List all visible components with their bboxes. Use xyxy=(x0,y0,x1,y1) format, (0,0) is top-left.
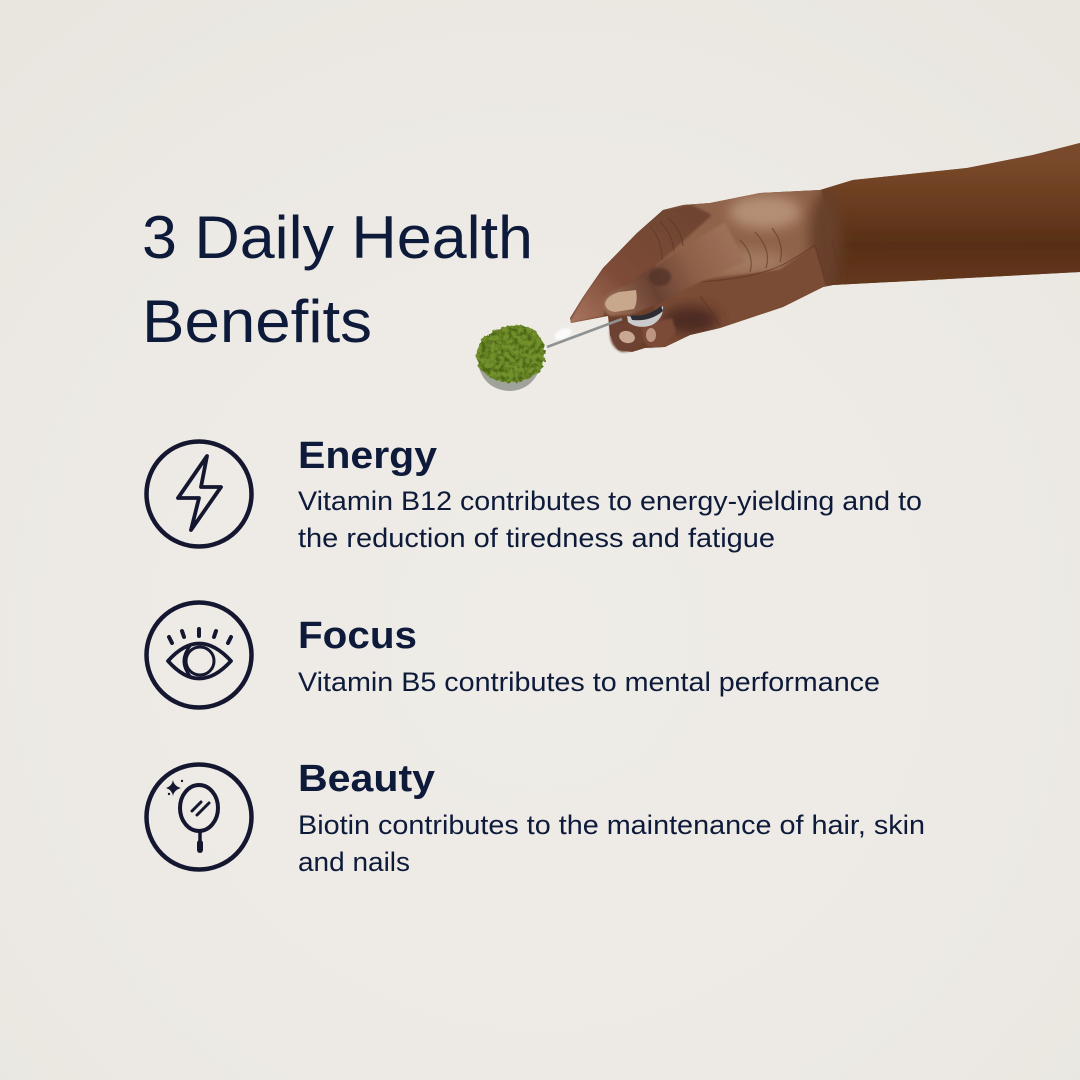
text: beauty description xyxy=(298,810,925,877)
text: beauty description: and nails xyxy=(298,847,410,877)
benefit: beauty xyxy=(146,758,925,877)
text: focus description: Vitamin B5 contributes to mental performance xyxy=(298,667,880,697)
heading: energy: Energy xyxy=(298,435,437,477)
metal ring xyxy=(627,306,663,327)
text: energy description: the reduction of tiredness and fatigue xyxy=(298,523,775,553)
text: beauty description: Biotin contributes to the maintenance of hair, skin xyxy=(298,810,925,840)
index finger xyxy=(568,204,712,324)
icon: hand mirror xyxy=(146,764,252,870)
green powder xyxy=(476,325,545,383)
text: energy description xyxy=(298,486,922,553)
thumb xyxy=(603,222,745,316)
spoon glint xyxy=(553,326,573,342)
lower fingers xyxy=(610,322,644,352)
knuckle and wrist creases xyxy=(650,218,900,326)
icon: lightning bolt xyxy=(146,442,252,546)
finger nails xyxy=(618,329,636,345)
forearm xyxy=(822,143,1080,287)
thumb nail xyxy=(605,290,637,312)
title: 3 Daily Health xyxy=(142,204,533,271)
benefit: energy xyxy=(146,435,922,553)
heading: beauty: Beauty xyxy=(298,758,435,800)
palm side xyxy=(650,246,828,352)
benefit: focus xyxy=(146,602,880,708)
spoon bowl xyxy=(479,368,540,391)
text: energy description: Vitamin B12 contributes to energy-yielding and to xyxy=(298,486,922,516)
icon: eye xyxy=(146,602,252,708)
title: Benefits xyxy=(142,288,372,355)
heading: focus: Focus xyxy=(298,615,417,657)
title xyxy=(142,204,533,355)
hand back xyxy=(656,190,822,280)
hand and arm xyxy=(570,143,1080,352)
photo: hand holding scoop of green powder xyxy=(475,143,1080,391)
spoon handle xyxy=(547,319,622,347)
